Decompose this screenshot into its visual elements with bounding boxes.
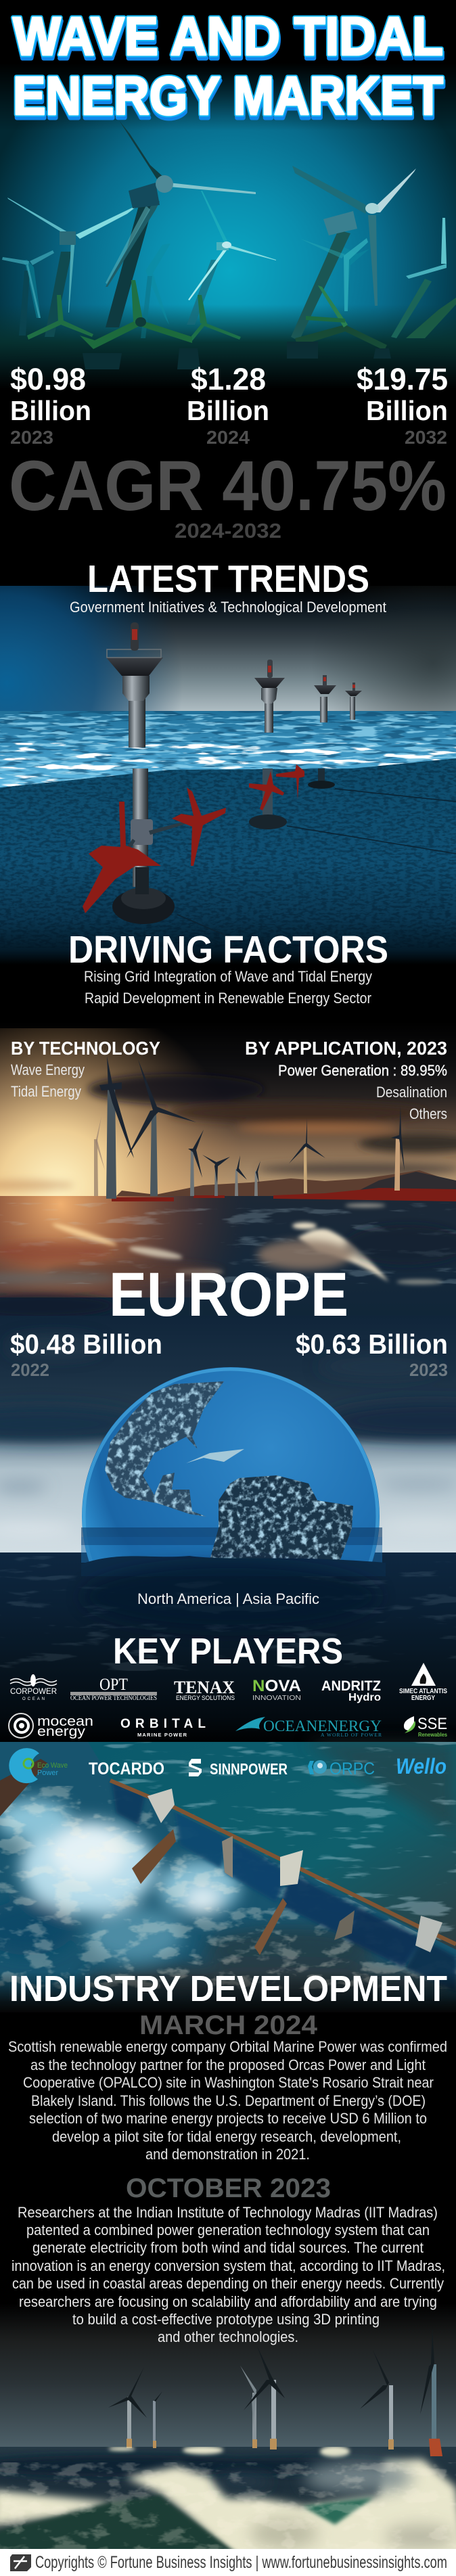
panel: by technology: Tidal Energy bbox=[11, 1083, 81, 1100]
panel: offshore wind sunset scene bbox=[0, 1021, 456, 1331]
continent: north america bbox=[105, 1381, 224, 1517]
left turbine bbox=[7, 198, 139, 340]
development text: october 2023: and other technologies. bbox=[158, 2328, 298, 2345]
development text: march 2024: develop a pilot site for tidal energy research, development, bbox=[52, 2128, 401, 2145]
heading: latest trends: LATEST TRENDS bbox=[87, 557, 369, 601]
market size stats bbox=[10, 362, 448, 448]
title shadow layer bbox=[14, 9, 444, 129]
logo: corpower: CORPOWER bbox=[10, 1686, 57, 1696]
logo: ocean energy: OCEANENERGY bbox=[263, 1718, 382, 1734]
tower 2 bbox=[249, 660, 287, 829]
stat 2023: Billion bbox=[10, 395, 91, 426]
heading: europe: EUROPE bbox=[109, 1260, 348, 1329]
logo: ocean power technologies: OCEAN POWER TECHNOLOGIES bbox=[70, 1695, 157, 1701]
continent: south america bbox=[210, 1475, 353, 1560]
driving factors list: Rapid Development in Renewable Energy Sector bbox=[85, 990, 371, 1007]
logo: eco wave power bbox=[9, 1748, 68, 1783]
europe stats: 2023 bbox=[409, 1360, 448, 1380]
dark swell bands bbox=[0, 2455, 406, 2477]
tower 1 bbox=[106, 622, 191, 924]
brown swell bbox=[0, 1224, 456, 1318]
title outline layer bbox=[13, 6, 443, 126]
logo: sinnpower: SINNPOWER bbox=[210, 1760, 288, 1778]
logo: corpower bbox=[10, 1674, 57, 1701]
big left turbine bbox=[80, 120, 256, 369]
europe stats: $0.63 Billion bbox=[296, 1329, 448, 1360]
piers bbox=[132, 1789, 442, 1955]
wind turbines bbox=[108, 2328, 442, 2456]
panel: by technology: BY TECHNOLOGY bbox=[11, 1038, 160, 1059]
stat 2024: Billion bbox=[187, 395, 269, 426]
shore and barges bbox=[112, 1188, 456, 1201]
logo: mocean energy: energy bbox=[37, 1724, 85, 1739]
logo: andritz hydro: ANDRITZ bbox=[321, 1678, 381, 1694]
europe stats: 2022 bbox=[11, 1360, 49, 1380]
stat 2032: Billion bbox=[366, 395, 448, 426]
logo: sinnpower bbox=[189, 1759, 288, 1778]
development date: march 2024: MARCH 2024 bbox=[139, 2010, 318, 2040]
development text: october 2023: to build a cost-effective prototype using 3D printing bbox=[72, 2311, 380, 2328]
caribbean islands bbox=[186, 1449, 244, 1463]
mountains bbox=[115, 1170, 456, 1201]
centre turbine bbox=[187, 191, 276, 341]
footer bbox=[0, 2549, 456, 2576]
panel: regional scene with globe bbox=[0, 1316, 456, 1745]
panel: by application: Power Generation : 89.95% bbox=[278, 1062, 447, 1079]
logo: nova innovation: INNOVATION bbox=[252, 1695, 301, 1702]
stat 2023: $0.98 bbox=[10, 362, 86, 396]
logo: andritz hydro bbox=[321, 1678, 381, 1703]
green water bbox=[0, 2496, 373, 2557]
logo: orbital marine power: MARINE POWER bbox=[137, 1732, 187, 1738]
title bbox=[13, 6, 444, 129]
globe bbox=[81, 1367, 382, 1563]
heading: key players: KEY PLAYERS bbox=[113, 1631, 343, 1672]
logo: eco wave power: Power bbox=[37, 1769, 58, 1777]
logo: ocean energy: A WORLD OF POWER bbox=[321, 1732, 382, 1738]
driving factors list bbox=[84, 968, 372, 1007]
other regions: North America | Asia Pacific bbox=[137, 1590, 319, 1607]
stat 2032: $19.75 bbox=[357, 362, 448, 396]
logos: key players row 2 bbox=[9, 1714, 448, 1739]
tower 3 bbox=[276, 675, 336, 800]
logo: andritz hydro: Hydro bbox=[348, 1692, 381, 1703]
logo: tocardo: TOCARDO bbox=[89, 1760, 164, 1778]
logo: orbital marine power bbox=[120, 1717, 206, 1738]
panel: storm waves with wind turbines bbox=[0, 2303, 456, 2564]
title white layer bbox=[13, 6, 443, 126]
water line bbox=[81, 1556, 386, 1576]
dam crest bbox=[110, 1780, 456, 1944]
logo: nova innovation: NOVA bbox=[252, 1677, 301, 1695]
spillways bbox=[112, 1779, 456, 1992]
europe stats: $0.48 Billion bbox=[10, 1329, 162, 1360]
development date: october 2023: OCTOBER 2023 bbox=[126, 2174, 331, 2203]
logo: simec atlantis: ENERGY bbox=[411, 1695, 435, 1702]
stat 2032: 2032 bbox=[405, 427, 447, 448]
stat 2024: 2024 bbox=[206, 427, 250, 448]
logo: ocean power technologies: OPT bbox=[99, 1676, 128, 1694]
development text: march 2024: and demonstration in 2021. bbox=[145, 2146, 310, 2163]
logo: orpc bbox=[308, 1760, 375, 1778]
far turbines right bbox=[300, 218, 456, 338]
panel: latest trends scene bbox=[0, 586, 456, 965]
clouds bbox=[0, 1074, 456, 1191]
wave crests bbox=[0, 2459, 456, 2564]
logo: sse renewables: Renewables bbox=[418, 1732, 448, 1738]
left structure bbox=[0, 1759, 47, 1816]
logo: eco wave power: Eco Wave bbox=[37, 1762, 68, 1770]
europe stats bbox=[10, 1329, 448, 1380]
logo: nova innovation bbox=[252, 1677, 301, 1702]
tower 4 bbox=[345, 683, 362, 720]
panel: by application bbox=[245, 1038, 447, 1122]
logo: corpower: OCEAN bbox=[22, 1697, 45, 1701]
development text: march 2024 bbox=[8, 2038, 447, 2163]
clouds bbox=[0, 1337, 456, 1534]
logo: ocean power technologies bbox=[70, 1676, 157, 1701]
foam bbox=[0, 1779, 456, 2002]
stat 2024 bbox=[187, 362, 269, 448]
panel: dam aerial scene bbox=[0, 1742, 456, 2013]
logo: orbital marine power: ORBITAL bbox=[120, 1717, 206, 1731]
heading: driving factors: DRIVING FACTORS bbox=[68, 928, 388, 971]
logo: sse renewables bbox=[404, 1715, 448, 1738]
stat 2032 bbox=[357, 362, 448, 448]
logo: wello: Wello bbox=[396, 1754, 447, 1778]
logos: key players row 1 bbox=[10, 1663, 447, 1703]
far turbine left bbox=[2, 250, 54, 336]
big right turbine bbox=[287, 166, 416, 359]
panel: by technology bbox=[11, 1038, 160, 1100]
logo: mocean energy: mocean bbox=[37, 1714, 93, 1729]
subheading: trends: Government Initiatives & Technological Development bbox=[70, 599, 386, 616]
wind turbines bbox=[94, 1056, 405, 1199]
panel: hero underwater turbines bbox=[0, 63, 456, 389]
logo: ocean energy bbox=[235, 1717, 382, 1738]
panel: by application: Desalination bbox=[376, 1084, 447, 1101]
logo: tenax: TENAX bbox=[174, 1678, 235, 1697]
wave crests bbox=[51, 1203, 442, 1285]
panel: by application: Others bbox=[409, 1105, 447, 1122]
panel: by application: BY APPLICATION, 2023 bbox=[245, 1038, 447, 1059]
panel: by technology: Wave Energy bbox=[11, 1061, 85, 1078]
driving factors list: Rising Grid Integration of Wave and Tidal Energy bbox=[84, 968, 372, 985]
logo: orpc: ORPC bbox=[329, 1760, 375, 1778]
development text: october 2023 bbox=[12, 2204, 445, 2345]
stat 2023: 2023 bbox=[10, 427, 53, 448]
logo: sse renewables: SSE bbox=[417, 1715, 447, 1733]
logo: simec atlantis bbox=[399, 1663, 447, 1702]
tower 1 rotors bbox=[83, 787, 226, 913]
stat 2024: $1.28 bbox=[191, 362, 266, 396]
cables bbox=[177, 789, 456, 940]
logo: mocean energy bbox=[9, 1714, 93, 1739]
logo: tenax: ENERGY SOLUTIONS bbox=[176, 1695, 235, 1702]
footer logo bbox=[10, 2554, 31, 2571]
CAGR: 2024-2032 bbox=[175, 519, 281, 543]
logos: key players row 3 bbox=[9, 1748, 447, 1783]
stat 2023 bbox=[10, 362, 91, 448]
